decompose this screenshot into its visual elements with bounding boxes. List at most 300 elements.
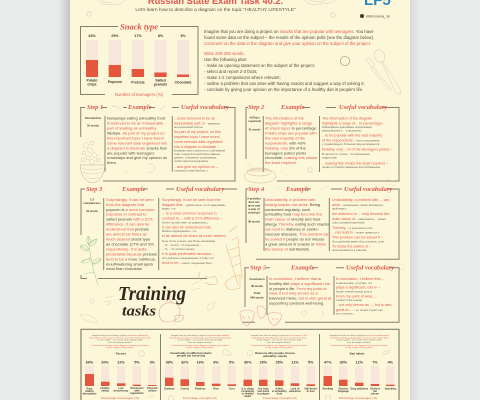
bar chart: ingredients — [130, 392, 144, 395]
task 2 prompt: on the subject of the project. — [186, 346, 214, 349]
bar chart: phone — [371, 392, 379, 395]
step 4 example: be solved if people do not misuse — [265, 237, 325, 242]
bar chart: 30% — [244, 360, 252, 364]
step 2 example: teenagers polled prefer — [265, 150, 307, 155]
step 3 word count: comparisons — [83, 201, 101, 205]
bar chart: Potatoes — [195, 388, 206, 390]
step 4 header — [248, 186, 392, 193]
text block: task description: Imagine that you are doing a project on snacks that are popular with teenagers. You have — [204, 29, 374, 34]
step 3 word count: 44 words — [86, 209, 99, 213]
step 4 vocabulary: This problem can be solved if – — [332, 236, 384, 240]
bar chart: alternatives — [83, 392, 97, 396]
step 5 vocabulary: но и отлично ... — [336, 312, 356, 316]
bar chart: 60% — [86, 360, 94, 364]
step 1 example — [107, 115, 168, 165]
task 2 prompt: food products people eat every day. You have found some data — [169, 336, 231, 339]
bar chart: Drug addiction — [350, 388, 369, 390]
step 3 example: popcorn is a more common — [106, 207, 154, 212]
task 1 prompt: Imagine that you are doing a project on factors influencing — [92, 334, 149, 337]
step 4 example: the advice of nutritionists. — [265, 247, 310, 252]
bar chart: 5% — [308, 360, 314, 364]
task 4 prompt: bad habits among young people. You have found some data — [330, 336, 389, 339]
icon: herb leaves top right — [275, 178, 405, 270]
bar chart: chips — [87, 82, 97, 86]
step 4 vocabulary: To follow the advice of – — [332, 244, 372, 248]
bar chart: 25% — [276, 360, 284, 364]
step 5 word count — [249, 277, 265, 300]
step 3 vocabulary: более частый ответ по сравнению с — [162, 220, 209, 224]
step 3 vocabulary: ... is a more common response in — [162, 212, 217, 216]
step 5 header: Example — [290, 264, 315, 272]
step 5 vocabulary — [336, 277, 392, 316]
step 3 vocabulary: It can also be understood that — [162, 225, 211, 229]
step 1 example: some relevant data organised into — [107, 140, 168, 145]
step 3 example: Surprisingly, it can be seen — [106, 197, 154, 202]
step 2 vocabulary: подростков — [322, 156, 337, 160]
step 4 example: a great amount of snacks or follow — [265, 242, 326, 247]
step 4 word count: 39 words — [248, 220, 261, 224]
bar chart: Rice — [213, 388, 219, 390]
panel: step 5 — [242, 264, 399, 322]
bar chart: Pretzels — [131, 80, 145, 84]
step 5 word count: 246 words — [250, 296, 264, 300]
bar chart: 17% — [134, 34, 142, 38]
step 4 header: Useful vocabulary — [344, 186, 392, 193]
step 2 header: Example — [280, 104, 305, 111]
text block: task description: Comment on the data in the diagram and give your opinion on the subject of the project. — [204, 41, 371, 46]
step 3 vocabulary: to be almost six times as much desired — [162, 234, 226, 238]
bar chart: Overuse — [370, 387, 381, 390]
step 1 word count: Introduction — [85, 116, 101, 120]
bar chart: 7% — [372, 360, 378, 364]
panel: task 4 bad habits — [322, 334, 396, 400]
chart title: people eat every day — [177, 354, 206, 358]
icon: small training sketches — [80, 281, 215, 322]
bar chart: Easy — [87, 388, 93, 390]
step 4 word count: solving it — [248, 210, 260, 214]
step 1 header: Step 1 — [87, 104, 103, 111]
step 4 example: having snacks can arise. Being — [265, 202, 320, 207]
bar chart: 3% — [150, 360, 156, 364]
step 1 vocabulary: неотъемлемой частью — [174, 125, 203, 129]
bar chart — [83, 360, 158, 396]
step 2 vocabulary: ...to be popular with the vast majority — [322, 133, 382, 137]
bar chart: culture — [148, 390, 157, 392]
step 3 vocabulary: ... %, ...% соответственно — [162, 247, 195, 251]
step 4 example: allergy. Thereby, eating such snacks — [265, 222, 329, 227]
icon: small food sketches step 1 — [112, 106, 166, 174]
panel: step 4 — [246, 186, 399, 259]
icon: orange drink glass — [199, 226, 242, 290]
step 1 example: lifestyle. As part of my project on — [107, 130, 165, 135]
bar chart — [86, 34, 192, 86]
step 2 vocabulary: highlights a range of... in percentage – — [322, 121, 386, 125]
bar chart: to unhealthy — [272, 390, 287, 393]
icon: small sketches near step 5 — [302, 311, 323, 316]
bar chart: Disinterest — [131, 387, 144, 390]
step 3 example: meal than chocolate. — [106, 266, 143, 271]
step 5 vocabulary: ...not only serves as ..., but is also — [336, 303, 392, 307]
bar chart: Physical — [147, 387, 158, 390]
step 1 vocabulary: some relevant data organised — [174, 140, 223, 144]
bar chart: to lose — [307, 390, 315, 393]
chart title: Snack type — [120, 22, 158, 32]
step 2 vocabulary: The information of the diagram — [322, 116, 372, 120]
step 2 example — [265, 115, 318, 165]
panel: bottom training tasks frame — [81, 329, 399, 400]
step 1 header: Useful vocabulary — [181, 104, 229, 111]
bar chart: 11% — [291, 360, 299, 364]
step 3 example: response in contrast to — [106, 212, 147, 217]
step 3 vocabulary: It is quite predictable because – — [162, 252, 215, 256]
task 4 prompt — [330, 334, 389, 349]
step 5 example: in people's life. From my point of — [269, 286, 327, 291]
heading: training tasks: tasks — [122, 304, 156, 320]
step 2 vocabulary: ...making this choice the least required – — [322, 161, 389, 165]
step 2 vocabulary: В частности, только ...% опрошенных — [322, 152, 371, 156]
task 3 prompt: on the subject – the results of the opinion polls — [256, 339, 302, 342]
step 2 vocabulary: у подавляющего большинства респондентов — [322, 142, 380, 146]
chart title — [255, 351, 295, 358]
step 4 vocabulary — [332, 198, 390, 252]
icon: plates at top — [98, 0, 335, 5]
bar chart: 12% — [117, 360, 125, 364]
step 3 example: as chocolate (17% and 3% — [106, 242, 154, 247]
step 5 header: Step 5 — [250, 264, 267, 272]
task 1 prompt: on the subject – the results of the opinion polls — [98, 339, 143, 342]
step 5 vocabulary: в заключение, я считаю, что — [336, 282, 373, 285]
step 3 example: salted peanuts with a 21% — [106, 217, 153, 222]
step 2 example: The information of the — [265, 115, 305, 120]
panel: step 1 — [81, 104, 235, 181]
bar chart: Abusive — [338, 387, 349, 390]
bar chart: Canola — [181, 388, 189, 390]
icon: plate sketch — [244, 162, 312, 183]
heading: training tasks: Training — [118, 283, 186, 305]
step 3 vocabulary: быть почти в шесть раз более желаемым — [162, 239, 215, 243]
step 5 vocabulary: plays a significant, role in – — [336, 286, 381, 290]
step 5 word count: Conclusion — [249, 277, 265, 281]
step 2 example: the least required. — [265, 160, 297, 165]
icon: green herb — [80, 236, 101, 285]
task 4 prompt: Imagine that you are doing a project on the most widespread — [330, 334, 389, 337]
step 3 vocabulary: Можно подразумевать, что — [162, 229, 197, 233]
step 2 example: diagram highlights a range — [265, 120, 313, 125]
step 2 example: the vast majority of the — [265, 135, 306, 140]
bar chart: 32% — [181, 360, 189, 364]
text block: task description: Write 200-250 words. — [204, 51, 245, 56]
text block: task description: - conclude by giving your opinion on the importance of a healthy diet in people's life. — [204, 87, 363, 92]
step 5 vocabulary: From my point of view, ... — [336, 294, 377, 298]
bar chart: Popcorn — [108, 80, 122, 84]
step 3 example: predictable because pretzels — [106, 252, 157, 256]
bar chart: 16% — [197, 360, 205, 364]
step 4 word count: A problem — [247, 196, 261, 200]
step 2 header: Useful vocabulary — [339, 104, 387, 111]
step 1 vocabulary: ...is/are believed to be an — [174, 116, 215, 120]
bar chart: It is easy — [258, 387, 269, 390]
step 4 header: Example — [285, 186, 310, 193]
step 1 vocabulary: inseparable part of – являются — [174, 121, 220, 125]
text block: task description: - select and report 2-3 facts; — [204, 69, 258, 74]
task 3 prompt: Imagine that you are doing a project on the reasons of the — [251, 334, 308, 337]
text block: task description — [204, 29, 374, 92]
step 5 example: In conclusion, I believe that a — [269, 276, 321, 281]
bar chart: the — [373, 390, 377, 393]
task 1 prompt — [89, 334, 152, 349]
step 1 vocabulary: As part of my project, on this — [174, 130, 221, 134]
step 1 example: this important topic I have found — [107, 135, 164, 140]
step 5 vocabulary: great at... – не только служит как ... — [336, 308, 386, 312]
step 3 example: from the diagram that — [106, 202, 145, 207]
bar chart: 39% — [166, 360, 174, 364]
step 1 example: them. — [107, 160, 117, 165]
task 4 prompt: (see the diagram below). — [347, 341, 371, 344]
step 4 vocabulary: ...can lead to – может привести к — [332, 231, 380, 235]
subtitle: Let's learn how to describe a diagram on the topic "HEALTHY LIFESTYLE" — [135, 7, 296, 13]
chart title: unhealthy snacks — [263, 354, 288, 358]
task 3 prompt: popularity of unhealthy food. You have found some data — [252, 336, 307, 339]
text block: task description: - make 1-2 comparisons where relevant; — [204, 75, 281, 80]
step 2 word count: reported) — [248, 119, 261, 123]
step 4 example: vascular diseases. This problem can — [265, 232, 330, 237]
task 4 prompt: on the subject – the results of the opinion polls — [336, 339, 382, 342]
step 3 vocabulary: Surprisingly, it can be seen from the — [162, 198, 221, 202]
chart caption: Percentage of people (%) — [263, 396, 297, 400]
step 4 vocabulary: Undoubtedly, a problem with ... can — [332, 198, 390, 202]
step 4 vocabulary: стать основной причиной — [332, 221, 365, 225]
step 4 vocabulary: the addiction to ... may become the — [332, 212, 389, 216]
step 2 header: Step 2 — [248, 104, 265, 111]
bar chart: 30% — [340, 360, 348, 364]
step 1 vocabulary: данные, собранные в диаграмму, — [174, 155, 217, 159]
bar chart: 8% — [213, 360, 219, 364]
step 1 example: nowadays and give my opinion on — [107, 155, 167, 160]
step 3 example — [106, 197, 157, 271]
chart title: Factors — [116, 352, 127, 356]
task 2 prompt: Comment on the data in the diagram and give your opinion — [172, 344, 229, 347]
step 1 vocabulary: ...and give my opinion on – — [174, 165, 219, 169]
step 4 word count: arise and — [248, 204, 260, 208]
poster background — [70, 0, 410, 400]
step 5 example: view, it not only serves as a — [269, 291, 318, 296]
bar chart: Potato — [87, 78, 97, 82]
chart caption: Percentage of people (%) — [183, 396, 217, 400]
step 1 vocabulary: теме я нашел/ла некоторые важные — [174, 152, 221, 156]
step 4 example: can lead to diabetes or cardio- — [265, 227, 319, 232]
bar chart — [164, 360, 236, 390]
step 3 example: tend to be a more nutritious, — [106, 256, 156, 262]
step 3 example: are almost six times as — [106, 232, 147, 237]
step 1 example: are popular with teenagers — [107, 150, 154, 155]
step 1 example: part of leading an unhealthy — [107, 125, 156, 130]
step 4 vocabulary: arise – несомненно, может возникнуть — [332, 203, 384, 207]
step 4 vocabulary: main cause of – зависимость ... может — [332, 217, 387, 221]
bar chart: comparing — [241, 390, 255, 393]
bar chart: 29% — [111, 34, 119, 38]
step 4 vocabulary: проблема с — [332, 207, 347, 211]
step 1 example: is believed to be an inseparable — [107, 120, 164, 125]
bar chart: Chocolate — [175, 80, 192, 84]
social handle: nikhonova_te — [366, 14, 391, 18]
task 3 prompt: (see the diagram below). — [267, 341, 291, 344]
panel: task 2 genetically modified — [164, 334, 236, 400]
step 2 word count: 41 words — [248, 128, 261, 132]
step 4 example: consumed regularly, such — [265, 207, 310, 212]
task 3 prompt — [251, 334, 308, 349]
step 1 vocabulary — [174, 116, 226, 172]
step 3 header: Example — [121, 186, 146, 193]
step 3 vocabulary: tend to be – иметь тенденцию быть — [162, 261, 213, 265]
page shadow right — [410, 0, 420, 400]
step 5 example: supporting constant well-being. — [269, 300, 324, 306]
step 2 vocabulary: делая этот выбор наименее востребованным — [322, 165, 380, 169]
text block: task description: Use the following plan: — [204, 57, 247, 62]
step 5 header — [250, 264, 394, 272]
step 3 example: difference. It can also be — [106, 222, 150, 227]
step 5 vocabulary: In conclusion, I believe that – — [336, 277, 385, 281]
step 5 example: balanced menu, but is also great at — [269, 296, 332, 301]
bar chart: with — [134, 390, 140, 392]
bar chart: healthy — [85, 390, 94, 393]
bar chart: Still desire — [304, 387, 318, 390]
step 4 example — [265, 197, 330, 252]
bar chart: Snacking — [385, 388, 396, 390]
step 1 word count — [85, 116, 101, 128]
panel: step 3 — [81, 186, 237, 278]
step 1 header: Example — [127, 104, 152, 111]
step 2 vocabulary: Информация диаграммы подчёркивает — [322, 125, 373, 129]
step 5 vocabulary: играет значительную роль в — [336, 290, 373, 294]
task 4 prompt: Comment on the data in the diagram and give your opinion — [331, 344, 388, 347]
icon: small rings — [87, 12, 350, 66]
chart caption: Percentage of teenagers (%) — [101, 396, 139, 400]
bar chart: 47% — [324, 360, 332, 364]
bar chart: Addict — [275, 387, 283, 390]
step 5 example — [269, 276, 332, 306]
step 3 example: mouthwatering small quick — [106, 262, 153, 266]
step 4 word count: a way of — [248, 207, 260, 211]
step 3 vocabulary: contrast to ... with a 21% difference – — [162, 216, 224, 220]
panel: task 1 factors — [83, 334, 158, 400]
step 2 word count: 4 (Facts — [249, 116, 260, 120]
bar chart: and quick — [257, 390, 270, 393]
bar chart: meals — [244, 395, 252, 398]
bar chart: 5% — [134, 360, 140, 364]
step 4 header: Step 4 — [248, 186, 264, 193]
task 2 prompt — [169, 334, 231, 349]
step 3 example: respectively). It is quite — [106, 247, 147, 252]
chart axis caption: Number of teenagers (%) — [115, 92, 164, 97]
step 2 vocabulary: разнообразие в ... в процентах — [322, 128, 362, 132]
step 1 header — [87, 104, 229, 111]
bar chart: to prepare — [257, 392, 270, 395]
task 1 prompt: (see the diagram below). — [108, 341, 132, 344]
step 2 example: of snack types in percentage. — [265, 125, 317, 130]
bar chart: education — [289, 390, 301, 393]
step 2 example: Notably, only 3% of the — [265, 145, 307, 150]
panel: snack type chart — [80, 22, 198, 97]
step 3 header: Step 3 — [86, 186, 103, 193]
icon: spoon and fork — [365, 48, 401, 94]
chart title: Bad habits — [350, 352, 365, 356]
task 3 prompt: Comment on the data in the diagram and give your opinion — [251, 344, 308, 347]
chart caption: Percentage of teenagers (%) — [339, 396, 377, 400]
step 4 vocabulary: Эта проблема может быть решена, если — [332, 239, 384, 243]
bar chart: Soybean — [164, 388, 175, 390]
text block: task description: found some data on the subject – the results of the opinion polls (see the diagram below). — [204, 35, 374, 40]
bar chart: price/money — [114, 390, 129, 392]
step 2 word count — [248, 116, 261, 132]
step 2 example: chocolate, making this choice — [265, 155, 318, 160]
text block: task description: - outline a problem that can arise with having snacks and suggest a way of solving it; — [204, 81, 365, 86]
step 1 word count: 31 words — [87, 124, 100, 128]
bar chart: 20% — [101, 360, 109, 364]
step 3 vocabulary: ... %... % and ...% respectively – — [162, 243, 202, 247]
step 4 example: Undoubtedly, a problem with — [265, 197, 315, 202]
step 2 vocabulary — [322, 116, 393, 169]
chart title: Reasons why people choose — [255, 351, 295, 355]
bar chart: It is cheap — [242, 387, 254, 390]
bar chart — [322, 360, 396, 395]
step 3 header — [86, 186, 224, 193]
step 3 vocabulary — [162, 198, 226, 265]
step 1 vocabulary: и выразить своё мнение о — [174, 168, 208, 172]
bar chart: 5% — [229, 360, 235, 364]
step 1 example: a diagram to illustrate snacks that — [107, 145, 167, 150]
step 4 word count — [247, 196, 261, 224]
step 1 vocabulary: important topic I have found — [174, 135, 220, 139]
step 4 vocabulary: прислушиваться к советам — [332, 249, 366, 252]
bar chart: peanuts — [154, 82, 167, 86]
task 3 prompt: on the subject of the project. — [265, 346, 293, 349]
panel: step 2 — [246, 104, 399, 181]
step 3 vocabulary: Это довольно предсказуемо, потому что — [162, 256, 214, 260]
step 5 vocabulary: с моей точки зрения — [336, 298, 362, 302]
bar chart: 8% — [158, 34, 164, 38]
bar chart: language — [338, 390, 349, 393]
step 4 example: main cause of obesity and food — [265, 217, 320, 222]
bar chart: Low — [118, 387, 124, 390]
task 1 prompt: on the subject of the project. — [106, 346, 134, 349]
bar chart: 12% — [356, 360, 364, 364]
icon: strawberries — [240, 306, 281, 326]
bar chart: Healthy — [100, 387, 110, 390]
step 3 word count — [83, 198, 101, 213]
step 5 word count: 36 words — [251, 284, 264, 288]
heading: training tasks — [118, 283, 186, 320]
step 5 word count: Total — [254, 291, 260, 295]
step 3 word count: 1-2 — [90, 198, 94, 202]
page shadow left — [58, 0, 70, 400]
task 4 prompt: on the subject of the project. — [345, 346, 373, 349]
bar chart: food — [277, 392, 282, 395]
step 1 example: Nowadays eating unhealthy food — [107, 115, 165, 120]
step 2 example: Potato chips are popular with — [265, 130, 317, 135]
step 4 vocabulary: Thereby, – в результате этого — [332, 226, 373, 230]
step 4 example: unhealthy food may become the — [265, 212, 323, 217]
step 2 header — [248, 104, 387, 111]
bar chart: eating — [101, 390, 109, 392]
task 2 prompt: on the subject – the results of the opinion polls — [178, 339, 223, 342]
task 2 prompt: Imagine that you are doing a project on genetically modified — [171, 334, 230, 337]
step 5 example: healthy diet plays a significant role — [269, 281, 331, 286]
bar chart: 29% — [260, 360, 268, 364]
step 3 example: understood that pretzels — [106, 227, 149, 232]
icon: tomato sketch — [159, 299, 184, 322]
chart title — [170, 351, 212, 358]
icon: rings and sketches in training panels — [139, 350, 390, 400]
